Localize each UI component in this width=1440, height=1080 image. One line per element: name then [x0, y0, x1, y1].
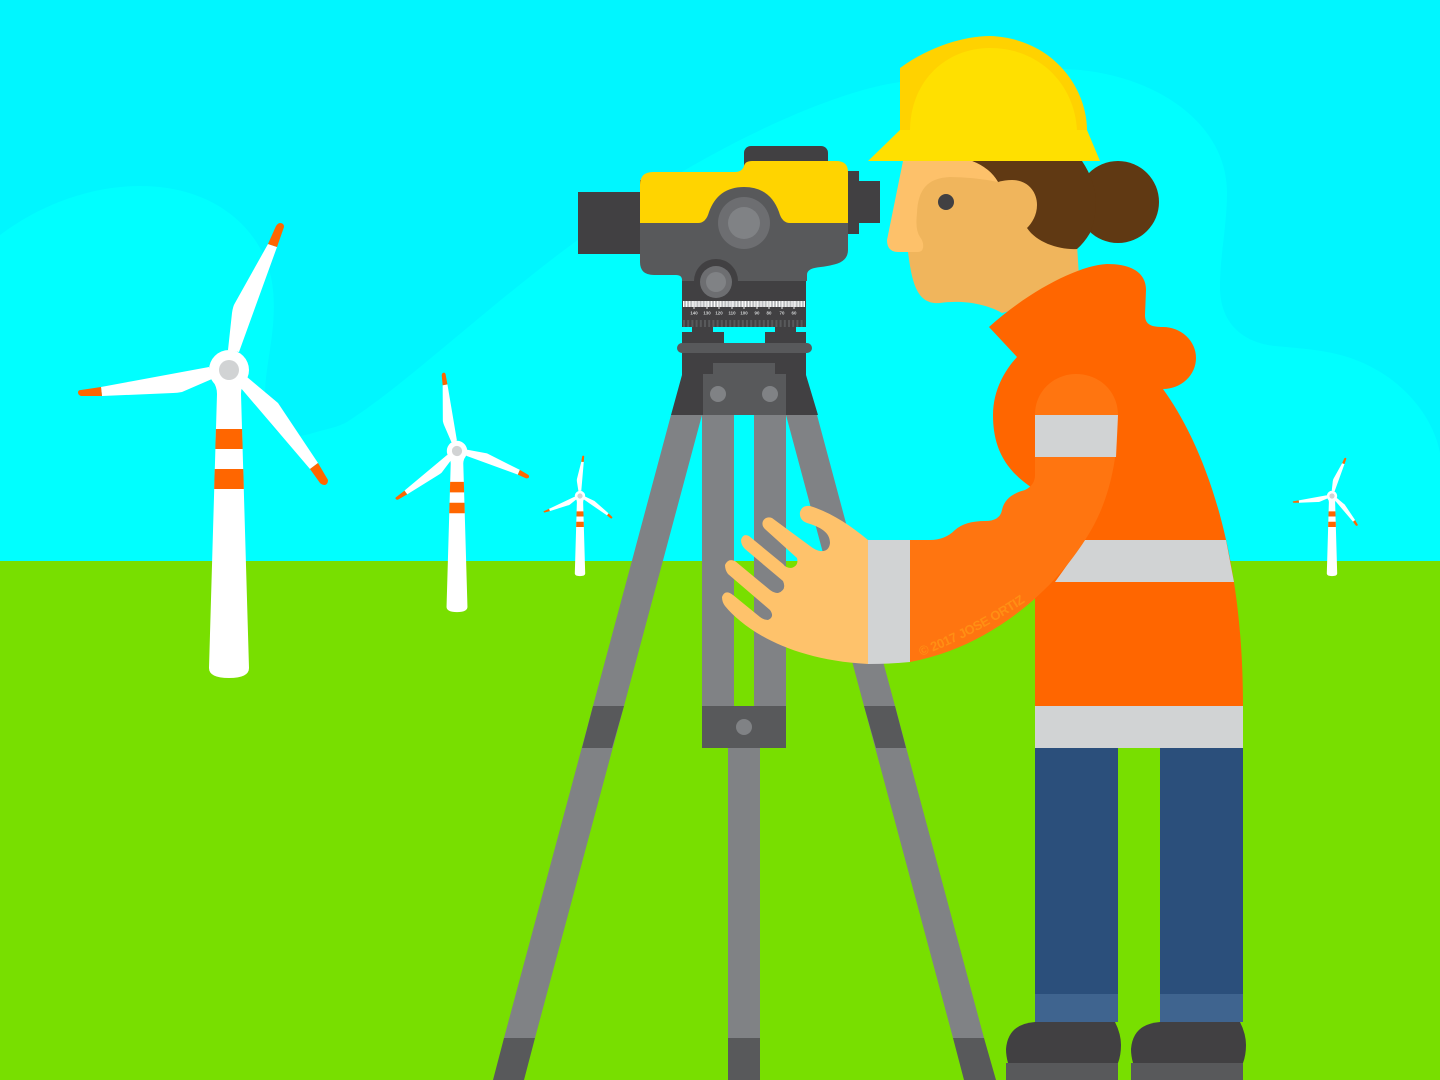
hair	[972, 161, 1096, 249]
forehead and nose	[887, 161, 998, 252]
face	[903, 161, 1080, 313]
wind turbine: small left	[532, 452, 613, 576]
eye	[938, 194, 954, 210]
ground	[0, 561, 1440, 1080]
bun	[1077, 161, 1159, 243]
wind turbine: small right	[1293, 458, 1358, 576]
levelling band	[677, 343, 812, 353]
sleeve	[910, 374, 1118, 662]
scale numbers: 130	[703, 310, 711, 316]
sleeve reflective stripe	[1035, 415, 1118, 457]
objective lens tube	[578, 192, 642, 254]
surveying level instrument	[578, 146, 880, 415]
scale numbers: 80	[767, 310, 772, 316]
angle scale	[683, 301, 805, 324]
tripod centre column	[702, 415, 786, 1080]
yellow housing	[640, 161, 848, 223]
copyright notice: © 2017 JOSE ORTIZ	[919, 594, 1025, 655]
trousers	[1035, 748, 1243, 1022]
hand	[722, 506, 868, 664]
instrument neck and scale housing	[682, 270, 806, 327]
tribrach plate	[671, 350, 818, 415]
glove cuff	[868, 540, 910, 664]
surveyor	[722, 36, 1246, 1080]
wind turbine: large	[78, 223, 328, 678]
scale numbers: 100	[740, 310, 748, 316]
scale numbers: 120	[715, 310, 723, 316]
boots	[1006, 1022, 1246, 1080]
hi-vis jacket	[989, 264, 1243, 706]
jacket hem stripe	[1035, 706, 1243, 748]
sky: lighter hills of air	[0, 69, 1440, 562]
mounting bracket	[703, 363, 786, 415]
jacket reflective stripe	[1055, 540, 1234, 582]
tripod left leg	[493, 415, 702, 1080]
scale numbers: 110	[728, 310, 736, 316]
wind turbine: medium	[353, 361, 530, 612]
rear eyepiece	[846, 171, 880, 234]
scale numbers: 70	[780, 310, 785, 316]
scale numbers: 60	[792, 310, 797, 316]
sky	[0, 0, 1440, 562]
mount feet	[682, 327, 806, 343]
tripod right leg	[786, 415, 996, 1080]
tripod	[493, 415, 996, 1080]
grey body	[640, 180, 848, 281]
tripod clamp	[702, 706, 786, 748]
hard hat	[868, 36, 1100, 161]
ear	[998, 180, 1037, 228]
scale numbers: 90	[755, 310, 760, 316]
top handle	[744, 146, 828, 180]
focus knob	[718, 197, 770, 249]
small adjustment knob	[694, 259, 738, 303]
scale numbers: 140	[690, 310, 698, 316]
